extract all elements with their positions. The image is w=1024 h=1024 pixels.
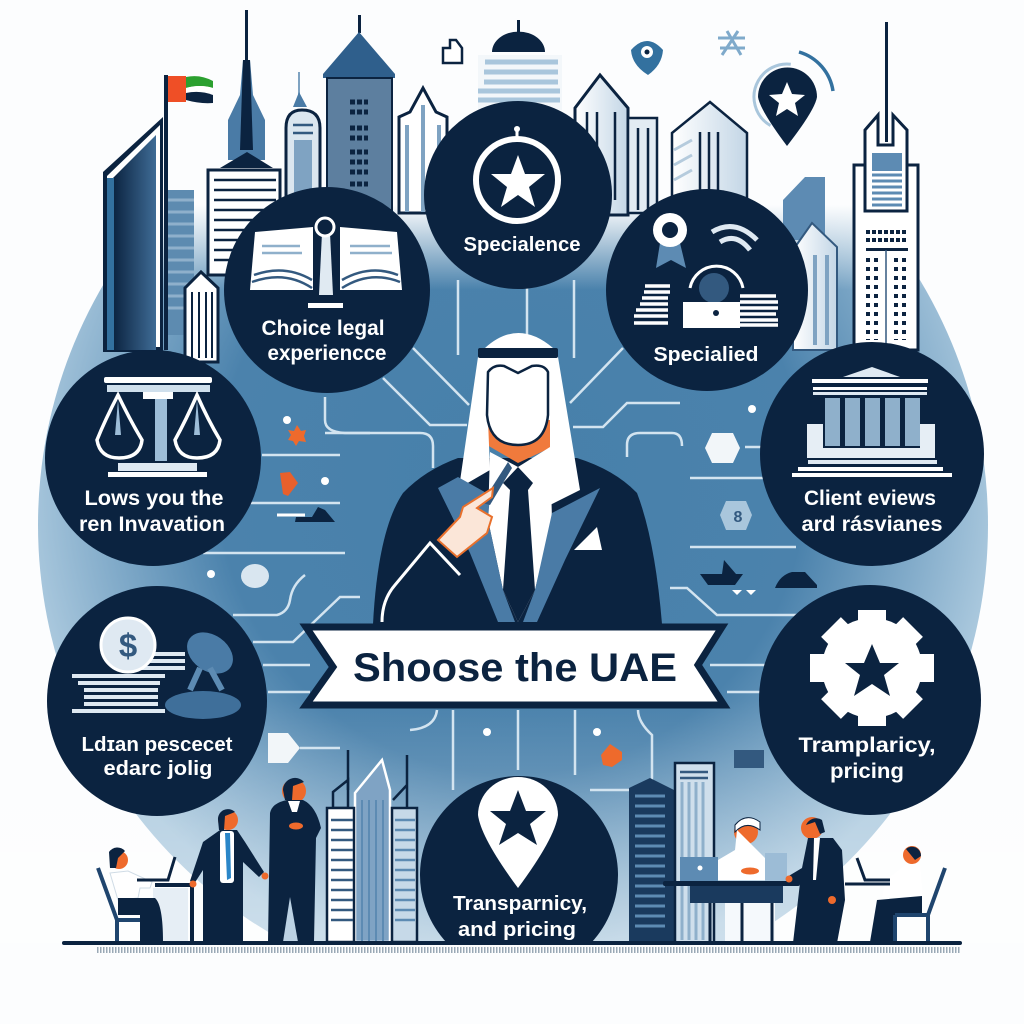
panel: transparency bottom	[420, 776, 618, 943]
left towers	[327, 750, 417, 942]
dark glass tower	[103, 117, 163, 352]
panel: transparency bottom: and pricing	[458, 919, 576, 941]
striped building	[208, 152, 280, 275]
blue building behind flag	[168, 190, 194, 335]
icon: shield	[631, 41, 663, 75]
small map markers	[207, 405, 817, 768]
icon: cross mark	[718, 31, 745, 55]
jacket	[373, 458, 662, 624]
icon: orange hands	[601, 744, 622, 767]
icon: hexagon number	[720, 501, 752, 530]
icon: hexagon number: 8	[734, 509, 743, 526]
standing man right	[786, 817, 845, 943]
panel: transparency right: Tramplaricy,	[798, 734, 936, 757]
icon: open book and pillar	[250, 218, 402, 308]
tie	[503, 467, 535, 622]
panel: client reviews	[760, 342, 984, 566]
pen	[482, 462, 512, 505]
panel: transparency right	[759, 585, 981, 815]
icon: coin, books and gavel: $	[119, 627, 137, 664]
icon: tag	[268, 733, 300, 763]
ground line	[62, 941, 962, 945]
small top icons	[443, 31, 833, 146]
pale towers right of centre	[575, 75, 747, 215]
network lines	[203, 280, 797, 790]
icon: house	[443, 40, 462, 63]
icon: scales of justice	[97, 377, 220, 477]
panel: transparency bottom: Transparnicy,	[453, 893, 587, 915]
panel: laws: ren Invavation	[79, 513, 225, 536]
bottom scene	[62, 750, 962, 950]
icon: car	[775, 572, 817, 588]
icon: gear with star	[810, 610, 934, 726]
small left tower	[185, 272, 218, 362]
blue backdrop circle	[38, 209, 988, 941]
panel: specialized	[606, 189, 808, 391]
panel: precedent: edarc jolig	[104, 758, 212, 780]
panel: laws: Lows you the	[84, 487, 224, 510]
icon: map pin with star	[742, 52, 833, 146]
icon: glove	[241, 564, 269, 588]
icon: coin, books and gavel	[72, 618, 241, 719]
panel: legal experience: experiencce	[268, 342, 386, 365]
panel: laws	[45, 350, 261, 566]
icon: boat	[700, 560, 743, 585]
face	[487, 366, 548, 445]
icon: orange folder	[280, 472, 298, 496]
banner	[306, 627, 724, 705]
icon: basket	[734, 750, 764, 768]
icon: hexagon badge	[705, 433, 740, 463]
panel: client reviews: ard rásvianes	[802, 513, 942, 536]
skyline	[103, 10, 918, 362]
left lapel	[438, 477, 515, 622]
low towers right	[783, 177, 837, 350]
icon: award, wifi, lock and stacks	[634, 213, 778, 328]
top centre dome	[478, 20, 562, 110]
icon: small vehicle on line	[277, 507, 335, 522]
icon: orange burst	[288, 425, 306, 446]
pale tower left of centre	[399, 88, 447, 213]
flag	[164, 75, 213, 350]
panel: specialized: Specialied	[654, 344, 758, 366]
icon: courthouse	[792, 367, 952, 477]
right tall tower	[854, 22, 918, 350]
standing man left	[190, 809, 268, 942]
panel: transparency right: pricing	[830, 760, 904, 783]
hand	[438, 488, 493, 557]
agal band	[478, 348, 558, 358]
neck	[487, 420, 552, 463]
central figure: advisor in suit	[373, 333, 662, 624]
panel: specialence: Specialence	[464, 234, 580, 256]
person at desk left	[98, 847, 192, 942]
pocket square	[574, 527, 602, 550]
dotted ground band	[97, 947, 960, 953]
panel: client reviews: Client eviews	[804, 487, 936, 510]
shirt	[488, 447, 552, 622]
panel: precedent	[47, 586, 267, 816]
icon: map pin star	[478, 777, 558, 888]
keffiyeh	[459, 333, 580, 505]
sleeve line	[382, 543, 460, 622]
right towers	[629, 763, 714, 943]
seated man in white robe and table	[663, 818, 800, 943]
banner heading: Shoose the UAE	[353, 646, 677, 690]
panel: specialence	[424, 101, 612, 289]
icon: chevrons	[732, 590, 756, 595]
spire tower	[228, 10, 265, 160]
panel: legal experience	[224, 187, 430, 393]
standing man centre-left	[268, 778, 321, 942]
seated man right	[845, 846, 945, 943]
cone tower	[323, 15, 395, 210]
panel: precedent: Ldɪan pescecet	[82, 734, 233, 756]
right lapel	[523, 488, 600, 622]
slim tower	[286, 72, 320, 200]
panel: legal experience: Choice legal	[262, 317, 384, 340]
icon: star compass	[476, 126, 558, 221]
